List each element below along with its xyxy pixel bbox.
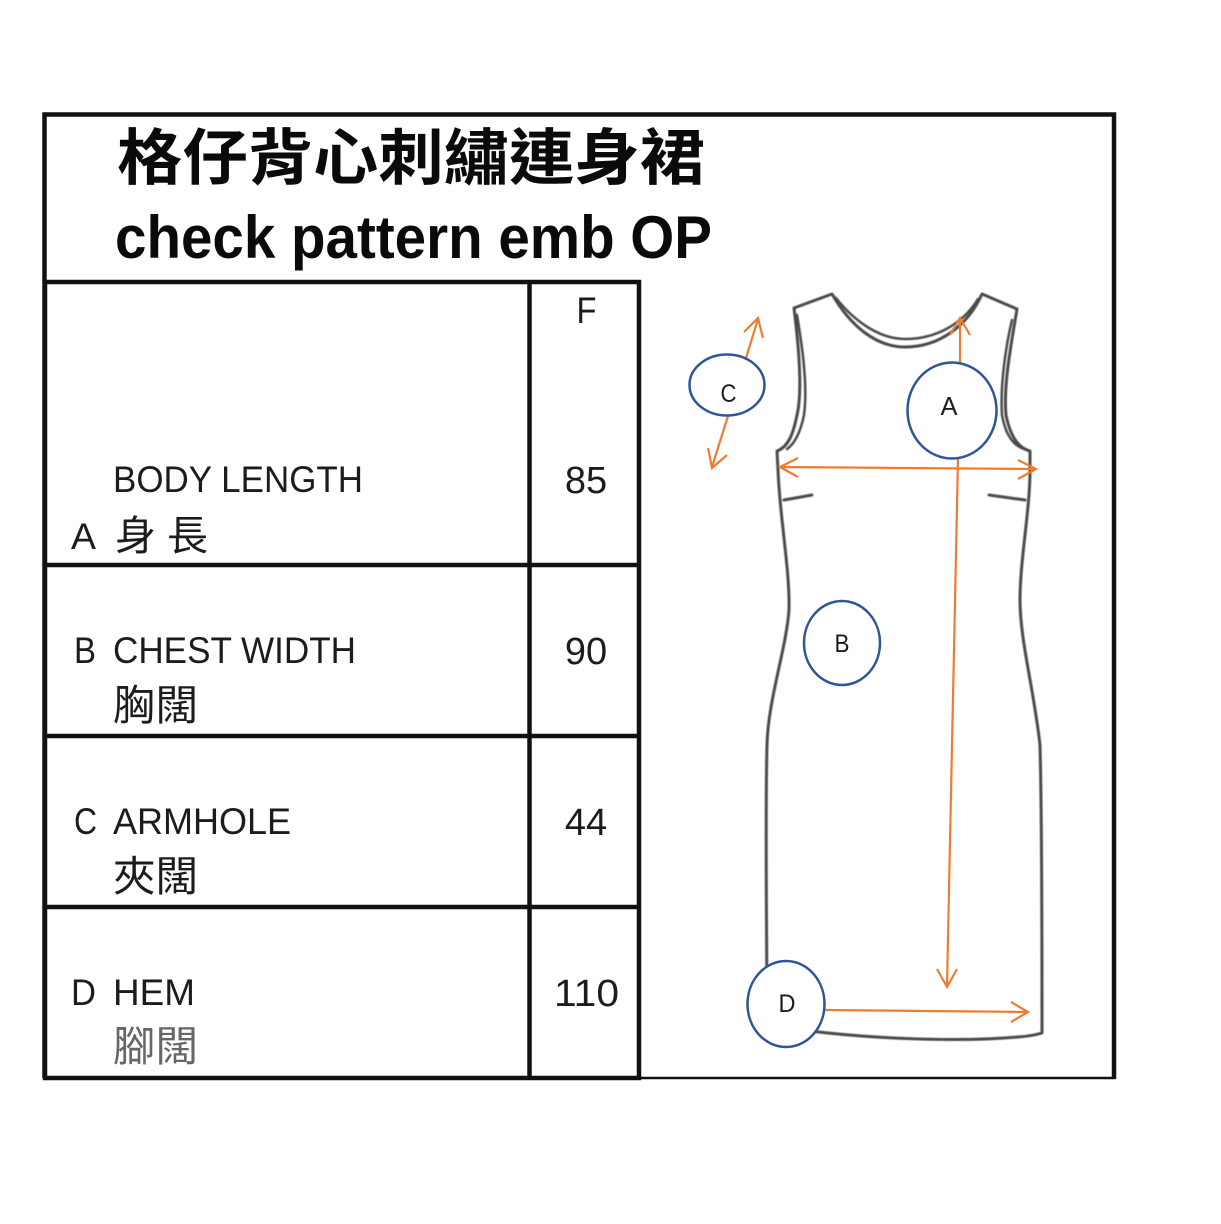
arrow A: body length <box>937 318 970 987</box>
row B: chest width: 胸闊 <box>113 682 198 729</box>
size table <box>45 282 639 1078</box>
row A: body length <box>71 459 607 559</box>
row D: hem: HEM <box>113 972 195 1013</box>
marker D <box>748 961 824 1047</box>
measurement arrows <box>708 318 1036 1022</box>
header: size F: F <box>576 290 596 331</box>
marker A <box>908 362 996 458</box>
marker B <box>804 601 880 685</box>
row A: body length: 85 <box>565 460 607 502</box>
row A: body length: 身 <box>115 513 156 559</box>
row A: body length: 長 <box>167 513 208 559</box>
row A: body length: A <box>71 516 96 557</box>
row B: chest width: B <box>74 630 96 671</box>
table grid <box>45 282 639 1078</box>
row D: hem: D <box>71 972 96 1013</box>
marker C <box>690 354 764 416</box>
title: check pattern emb OP <box>115 204 712 271</box>
row C: armhole: 夾闊 <box>113 853 198 900</box>
title: 格仔背心刺繡連身裙 <box>117 124 705 192</box>
marker A: A <box>940 391 958 421</box>
row C: armhole <box>74 801 607 900</box>
row D: hem: 腳闊 <box>113 1023 198 1070</box>
row C: armhole: C <box>74 801 97 842</box>
marker D: D <box>778 990 796 1018</box>
marker C: C <box>720 380 736 408</box>
row B: chest width: CHEST WIDTH <box>113 630 356 671</box>
row C: armhole: ARMHOLE <box>113 801 291 842</box>
row C: armhole: 44 <box>565 802 607 844</box>
arrow B: chest width <box>780 458 1036 479</box>
outer frame <box>44 114 1115 1079</box>
row D: hem: 110 <box>554 973 619 1015</box>
row D: hem <box>71 972 619 1070</box>
marker B: B <box>834 630 850 658</box>
title <box>115 124 712 271</box>
dress illustration <box>766 294 1042 1039</box>
arrow C: armhole <box>708 318 763 468</box>
arrow D: hem <box>825 1002 1028 1022</box>
row B: chest width: 90 <box>565 631 607 673</box>
measurement markers <box>690 354 996 1047</box>
row B: chest width <box>74 630 607 729</box>
row A: body length: BODY LENGTH <box>113 459 363 500</box>
